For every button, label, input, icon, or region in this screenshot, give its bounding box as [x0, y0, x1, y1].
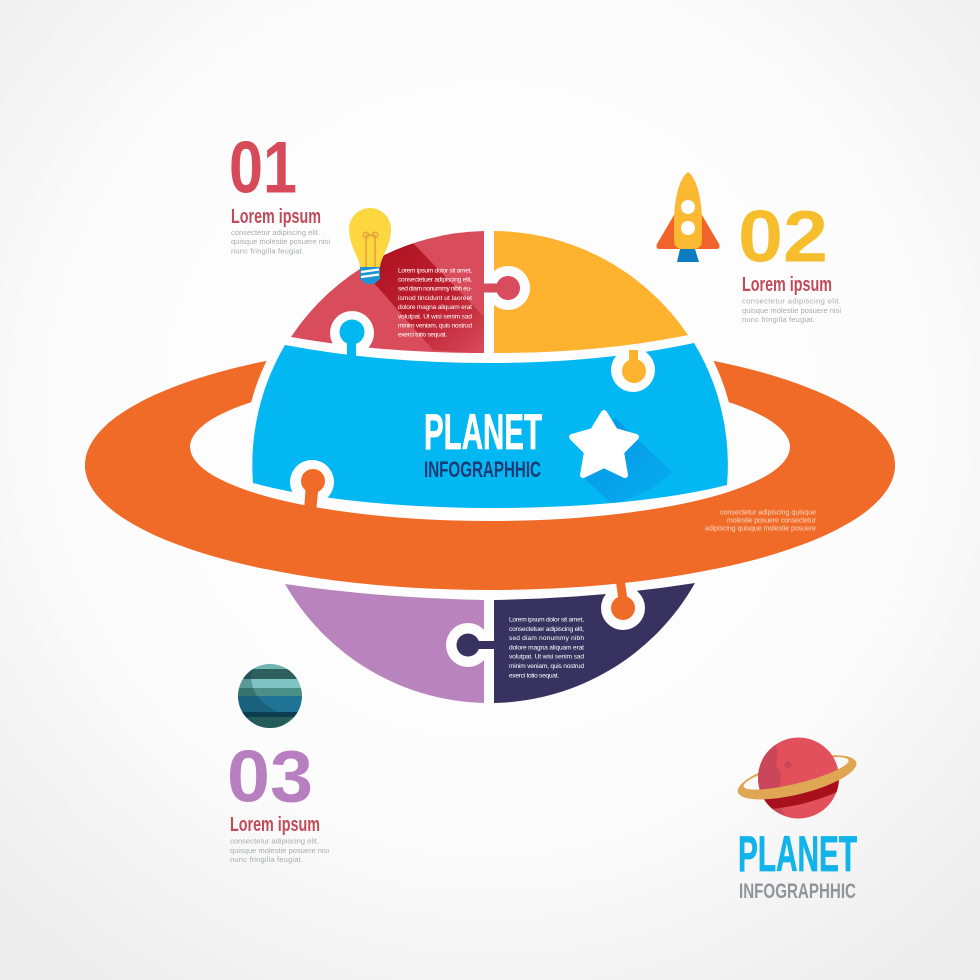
star long shadow — [583, 418, 672, 505]
section 01: consectetur adipiscing elit. — [231, 228, 320, 237]
ring caption: consectetur adipiscing quisque — [720, 510, 816, 516]
navy panel text: consectetuer adipiscing elit, — [509, 626, 584, 633]
navy panel text: sed diam nonummy nibh — [509, 635, 584, 642]
ring caption: adipiscing quisque molestie posuere — [705, 526, 816, 532]
red panel text: consectetuer adipiscing elit, — [398, 276, 472, 284]
center title: INFOGRAPHHIC — [424, 457, 541, 482]
red panel text: volutpat. Ut wisi senim sad — [398, 313, 472, 320]
red panel text: exerci totio sequat. — [398, 332, 447, 339]
section 02: Lorem ipsum — [742, 274, 832, 296]
bottom-right title: INFOGRAPHHIC — [739, 880, 856, 903]
navy panel text: exerci totio sequat. — [509, 672, 559, 679]
ring caption — [705, 510, 817, 532]
section 01: nunc fringilla feugiat. — [231, 246, 304, 256]
center title: PLANET — [424, 404, 542, 460]
navy panel text: minim veniam, quis nostrud — [509, 663, 584, 670]
icon: star — [572, 413, 636, 475]
puzzle piece: red — [291, 231, 484, 354]
icon: rocket — [656, 172, 720, 262]
section 03: 03 — [227, 736, 313, 818]
section 03: consectetur adipiscing elit. — [230, 836, 319, 846]
puzzle tabs — [290, 229, 655, 705]
red panel text — [398, 267, 472, 339]
ring: back section — [85, 340, 895, 590]
bottom-right title: PLANET — [738, 826, 857, 882]
section 03: quisque molestie posuere nisi — [230, 846, 329, 855]
red panel text: minim veniam, quis nostrud — [398, 322, 472, 330]
section 03 — [227, 736, 329, 864]
puzzle piece: blue — [252, 343, 728, 508]
red panel text: ismod tincidunt ut laoreet — [398, 295, 472, 302]
red panel text: sed diam nonummy nibh eu- — [398, 286, 472, 293]
navy panel text: Lorem ipsum dolor sit amet, — [509, 616, 584, 624]
section 02 — [738, 196, 841, 324]
section 02: quisque molestie posuere nisi — [742, 306, 841, 315]
section 02: consectetur adipiscing elit. — [742, 296, 841, 306]
icon: light bulb — [349, 208, 391, 284]
section 01: 01 — [229, 128, 297, 208]
puzzle piece: navy — [494, 583, 695, 703]
icon: striped teal planet — [238, 663, 302, 729]
bottom-right title — [738, 826, 857, 903]
puzzle piece: yellow — [494, 231, 688, 353]
section 02: 02 — [738, 196, 828, 278]
section 03: Lorem ipsum — [230, 814, 320, 836]
ring caption: molestie posuere consectetur — [727, 518, 817, 524]
red panel text: Lorem ipsum dolor sit amet, — [398, 267, 472, 274]
navy panel text: dolore magna aliquam erat — [509, 644, 584, 651]
section 02: nunc fringilla feugiat. — [742, 315, 815, 324]
red panel text: dolore magna aliquam erat — [398, 304, 472, 311]
section 01: Lorem ipsum — [231, 206, 321, 228]
navy panel text: volutpat. Ut wisi senim sad — [509, 654, 584, 661]
navy panel text — [509, 616, 584, 679]
section 01: quisque molestie posuere nisi — [231, 237, 330, 246]
center title — [424, 404, 542, 482]
section 01 — [229, 128, 330, 256]
puzzle piece: purple — [285, 584, 484, 703]
planet white outline — [242, 220, 738, 714]
icon: ringed red planet — [734, 738, 863, 818]
section 03: nunc fringilla feugiat. — [230, 855, 303, 864]
ring: front section — [85, 447, 895, 590]
